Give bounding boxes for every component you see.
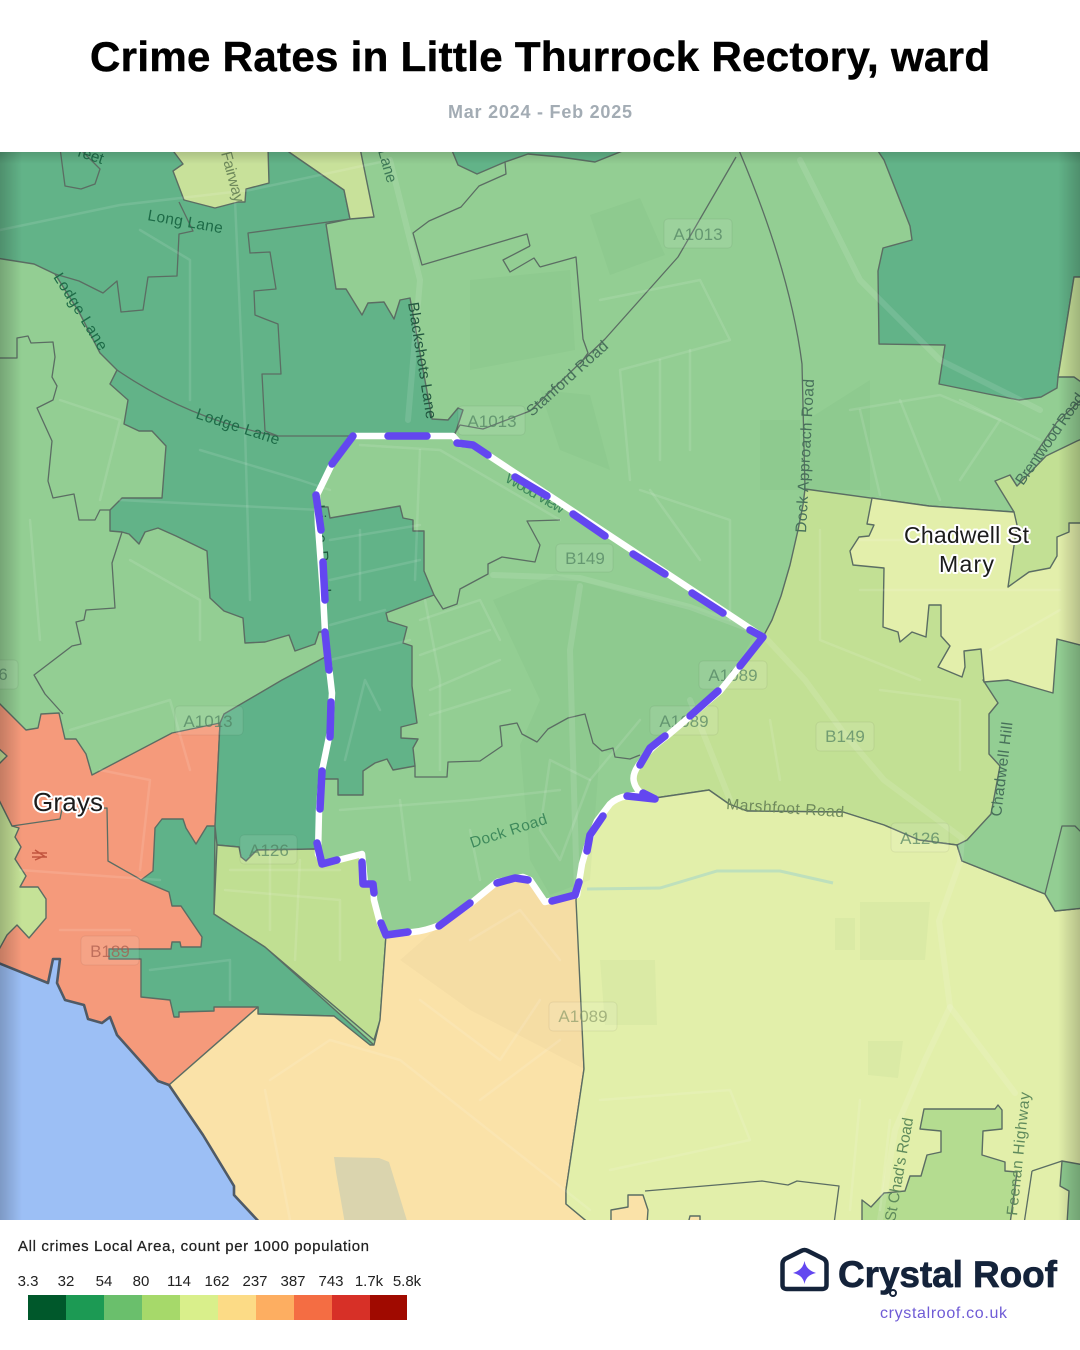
area: small pale sliver (0, 748, 8, 764)
place label: Chadwell St Mary: Mary (939, 551, 994, 577)
area: north-west dark green (0, 148, 463, 651)
shield: A126 east: A126 (900, 829, 940, 848)
road labels: Lodge Lane (194, 406, 282, 449)
logo: Crystal Roof (782, 1250, 1058, 1322)
area: far east pale patch (1058, 277, 1080, 384)
legend values: 80 (133, 1273, 149, 1290)
legend values: 387 (280, 1273, 306, 1290)
area: south-west dark green (109, 655, 374, 1045)
area: Fairway pale patch (171, 148, 269, 208)
road labels: Feenan Highway (1004, 1091, 1034, 1216)
area: top centre dark green (452, 152, 622, 175)
ward boundary: Little Thurrock Rectory (316, 436, 763, 935)
shield: B189: B189 (90, 942, 130, 961)
water channel (587, 871, 833, 889)
ward outline purple dashes (316, 436, 763, 935)
road labels: St Chad's Road (882, 1116, 917, 1223)
area: small orange notch (688, 1215, 701, 1220)
subtitle: date range: Mar 2024 - Feb 2025 (448, 102, 632, 122)
shield: A1013 centre (458, 406, 525, 435)
place label: Chadwell St Mary: Chadwell St (904, 522, 1030, 548)
area: port shaded zones (400, 880, 584, 1069)
ward outline white (317, 436, 763, 935)
legend values: 114 (167, 1273, 191, 1290)
area: grey industrial block (334, 1157, 408, 1224)
shield: A1089 lower (650, 706, 718, 735)
shield: B149 east (816, 722, 874, 751)
legend values: 237 (242, 1273, 268, 1290)
icon: house with star (782, 1250, 826, 1289)
area: north-east dark green (876, 148, 1080, 400)
place label: Grays: Grays (33, 787, 103, 817)
shield: clipped left edge (0, 660, 18, 689)
shield: A1089 south: A1089 (558, 1007, 608, 1026)
area: yellow-green east (636, 439, 1080, 844)
legend title: All crimes Local Area, count per 1000 population (18, 1238, 369, 1255)
logo wordmark y tail ring (890, 1290, 896, 1296)
road labels (50, 144, 1080, 1223)
legend values: 3.3 (18, 1273, 38, 1290)
shield: B149 centre (556, 544, 613, 572)
shield: A1013 west (175, 706, 243, 735)
area: far south-east green (1060, 1161, 1080, 1224)
shield: A1089 lower: A1089 (659, 712, 709, 731)
area: port orange-yellow (169, 877, 590, 1224)
legend colour scale (28, 1295, 407, 1320)
area: Grays west pale patch (0, 794, 46, 955)
area: south-east light yellow (566, 790, 1080, 1224)
road labels: Chadwell Hill (988, 721, 1017, 817)
legend values: 5.8k (393, 1273, 422, 1290)
website url: crystalroof.co.uk (880, 1305, 1008, 1322)
road labels: Dock Approach Road (793, 379, 818, 533)
area: Grays red-orange (0, 700, 258, 1085)
shield: A1013 west: A1013 (183, 712, 233, 731)
shield: A126 west: A126 (249, 841, 289, 860)
map base: light green areas (0, 152, 1080, 1044)
area: east mid green (957, 639, 1080, 911)
legend (18, 1238, 422, 1320)
road labels: Marshfoot Road (726, 796, 845, 821)
boundary lines between areas (0, 148, 1080, 1224)
road labels: Blackshots Lane (404, 301, 439, 420)
legend values: 162 (204, 1273, 230, 1290)
road labels: reet (76, 144, 106, 168)
shield: A1013 north: A1013 (673, 225, 723, 244)
road labels: Lodge Lane (50, 270, 111, 354)
area: dark green east of ward boundary (317, 506, 434, 795)
road labels: Wood View (502, 470, 568, 518)
road labels: Stanford Road (523, 338, 612, 420)
woodland shading patches (470, 198, 930, 1078)
road labels: Lane (374, 147, 400, 185)
place label: Chadwell St Mary (904, 522, 1030, 577)
road labels: Lime Road (310, 504, 333, 593)
area: southern green block (862, 1105, 1017, 1224)
map edge vignette (0, 152, 1080, 1220)
road labels: Dock Road (468, 811, 549, 852)
area: southern orange notch (611, 1195, 648, 1224)
shield: A1013 north (664, 219, 732, 248)
shield: B189 (81, 936, 139, 965)
shield: A1089 upper (699, 661, 767, 689)
icon: railway station (32, 850, 47, 860)
road labels: Fairway (217, 150, 247, 205)
shield: A126 east (891, 823, 949, 852)
area: A126 yellow-green (214, 845, 386, 1040)
area: Chadwell St Mary pale yellow (850, 498, 1080, 693)
shield: A1013 centre: A1013 (467, 412, 517, 431)
area: northern pale patch (289, 148, 374, 219)
sea (0, 959, 261, 1224)
shield: B149 east: B149 (825, 727, 865, 746)
legend values (18, 1273, 422, 1290)
title: Crime Rates in Little Thurrock Rectory, ward (90, 33, 990, 80)
shield: A1089 south (549, 1002, 617, 1031)
legend values: 1.7k (355, 1273, 384, 1290)
shield: B149 centre: B149 (565, 549, 605, 568)
road network (0, 160, 1060, 1220)
legend values: 32 (58, 1273, 74, 1290)
shield: A1089 upper: A1089 (708, 666, 758, 685)
road labels: Long Lane (146, 207, 224, 237)
legend values: 743 (318, 1273, 344, 1290)
shield: A126 west (240, 835, 297, 864)
legend values: 54 (96, 1273, 112, 1290)
logo wordmark: Crystal Roof (838, 1254, 1058, 1295)
